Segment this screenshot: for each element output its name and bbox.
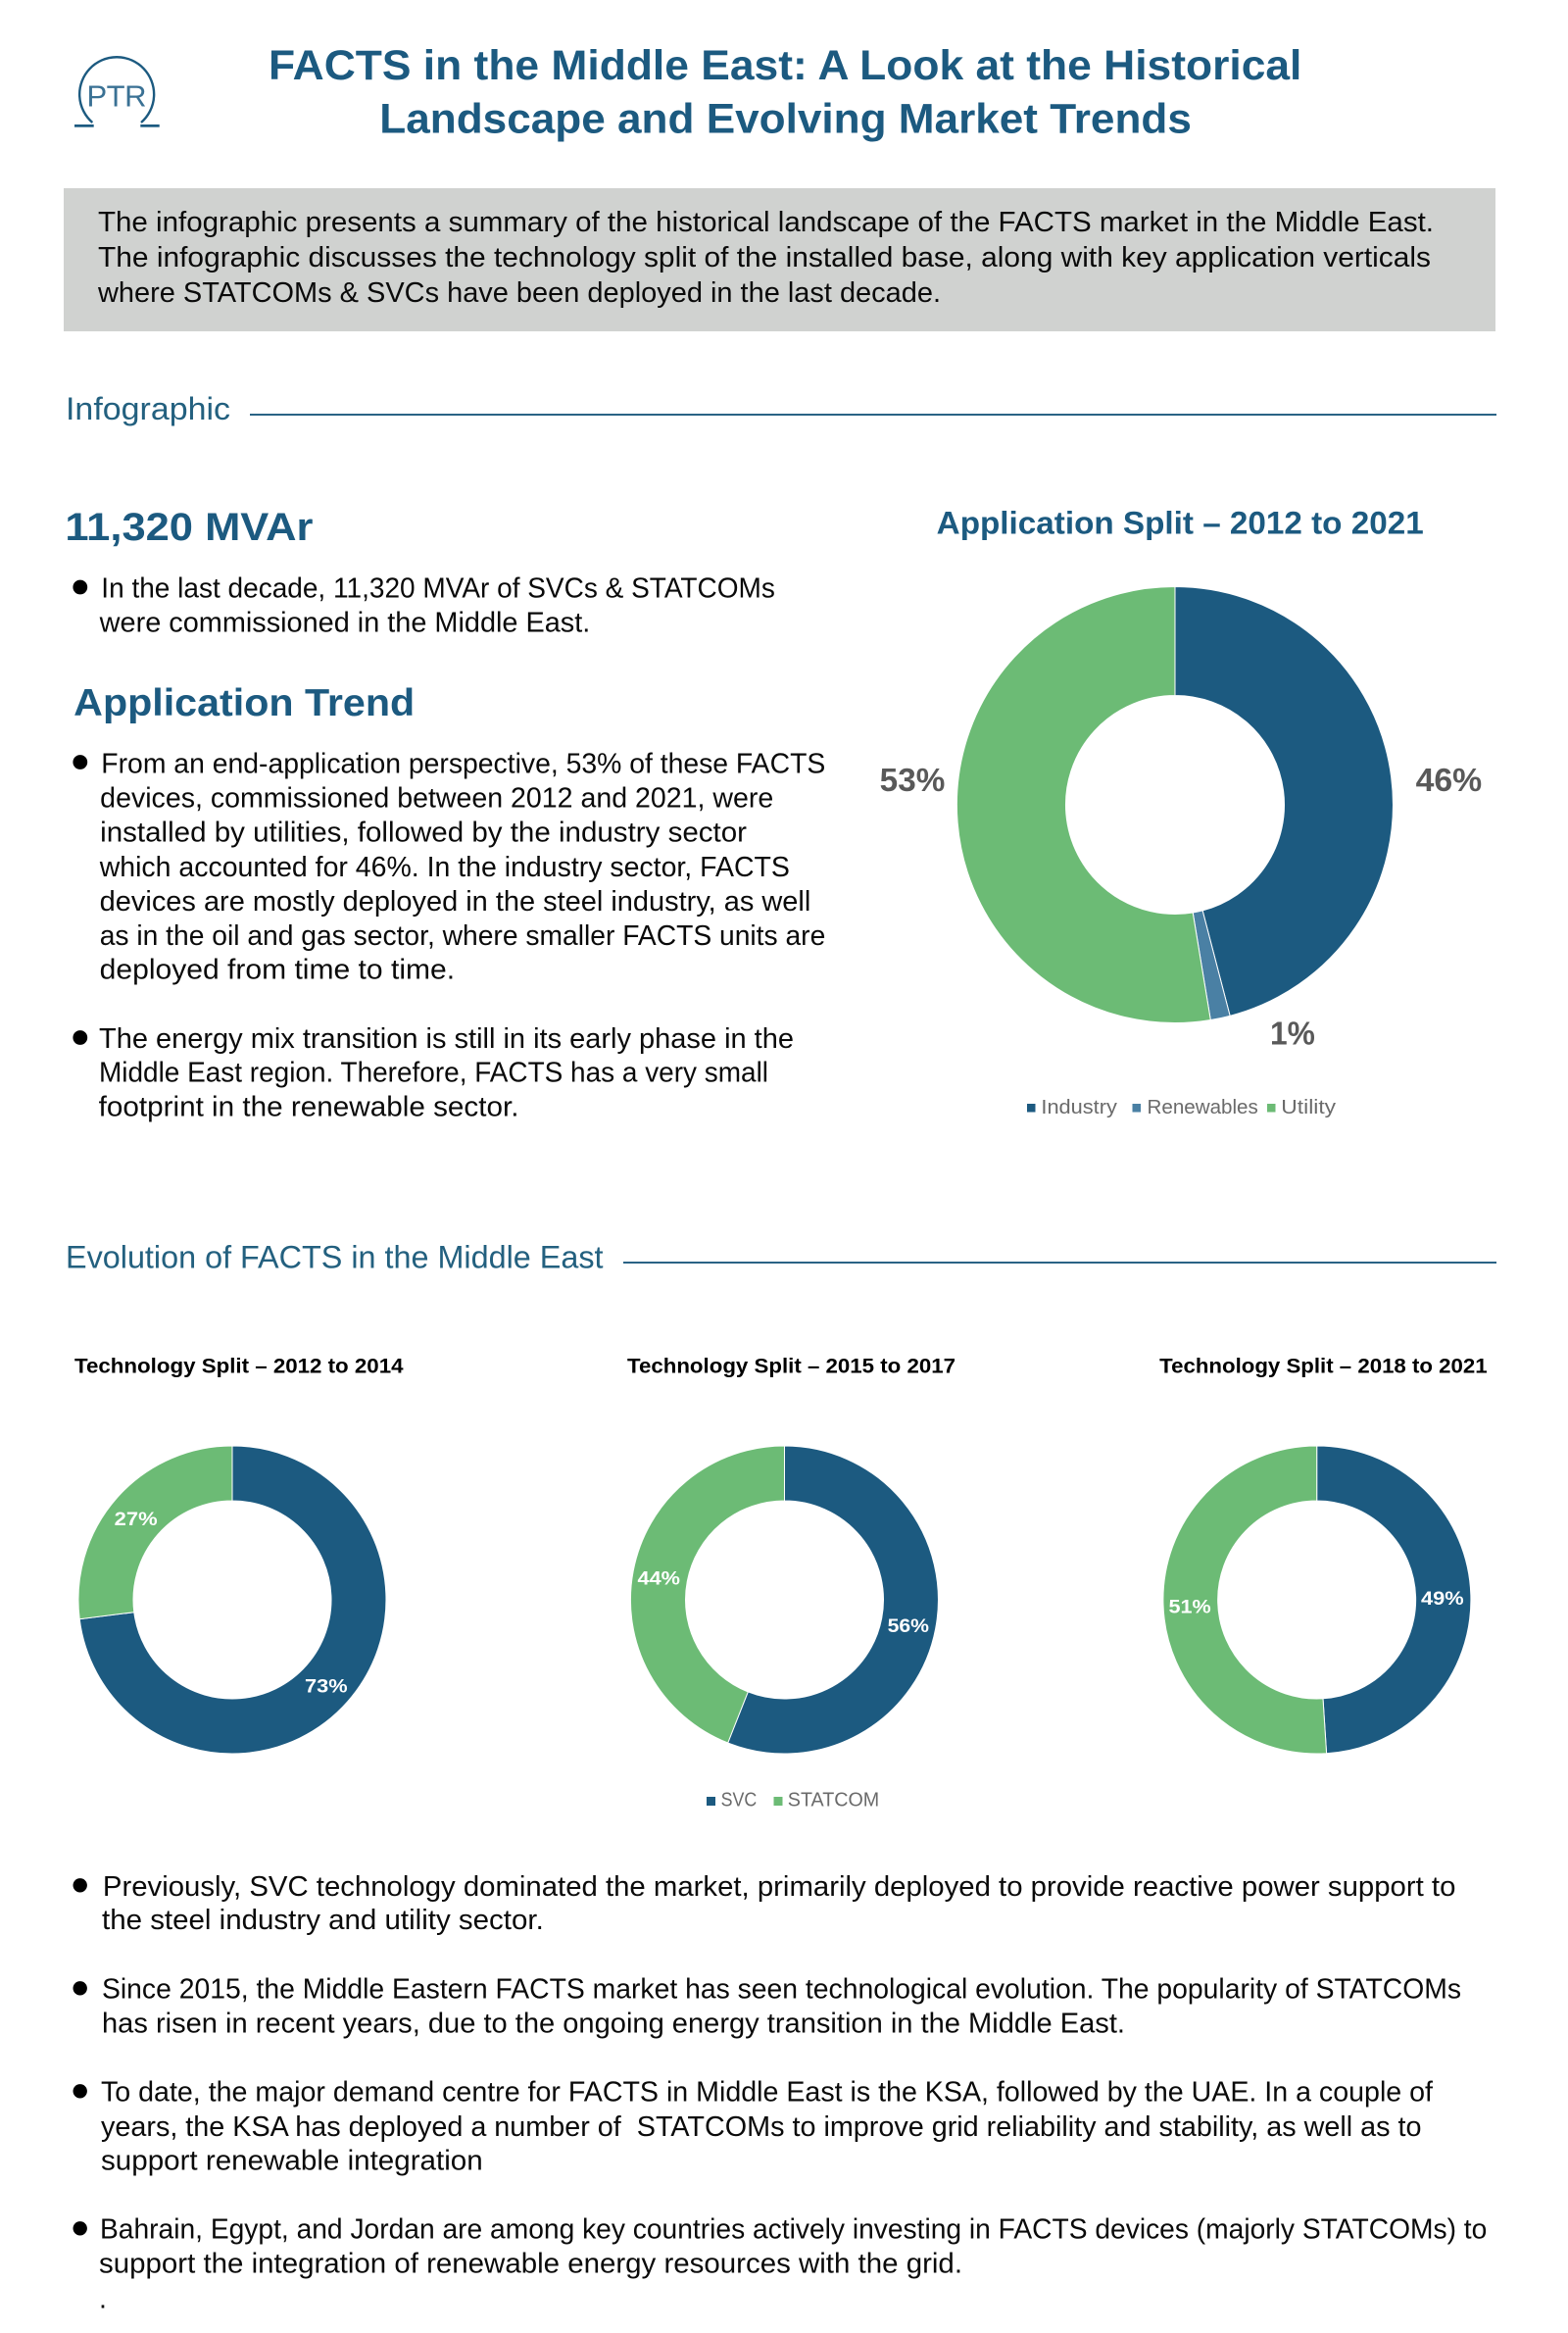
text block: SVC dominance bullet: the steel industry and utility sector. — [102, 1905, 544, 1936]
legend: technology split — [707, 1790, 879, 1812]
data labels: application split — [880, 762, 1482, 1051]
donut chart: 2018 to 2021 — [1163, 1446, 1471, 1754]
legend: application split: Renewables — [1147, 1097, 1258, 1118]
data labels: application split: 53% — [880, 762, 945, 798]
text block: installed capacity bullet: In the last decade, 11,320 MVAr of SVCs & STATCOMs — [101, 572, 775, 604]
donut chart: 2012 to 2014: 73% — [305, 1677, 348, 1698]
donut chart: 2018 to 2021: 49% — [1421, 1589, 1464, 1610]
text block: end-application bullet: From an end-application perspective, 53% of these FACTS — [101, 748, 825, 779]
title — [269, 42, 1301, 143]
text block: investing countries bullet: Bahrain, Egypt, and Jordan are among key countries actively investing in FACTS devices (majorly STATCOMs) to — [100, 2213, 1487, 2245]
text block: installed capacity bullet: were commissioned in the Middle East. — [99, 607, 590, 638]
segment: Industry 46% — [1175, 586, 1393, 1016]
text block: end-application bullet: devices, commissioned between 2012 and 2021, were — [100, 782, 773, 814]
text block: end-application bullet — [73, 748, 825, 986]
heading: 11,320 MVAr: 11,320 MVAr — [65, 506, 313, 549]
text block: end-application bullet: as in the oil and gas sector, where smaller FACTS units are — [100, 920, 825, 952]
data labels: application split: 46% — [1416, 762, 1482, 798]
text block: technological evolution bullet: Since 2015, the Middle Eastern FACTS market has seen technological evolution. The popularity of STATCOMs — [102, 1974, 1461, 2006]
text block: demand centre bullet: years, the KSA has deployed a number of STATCOMs to improve grid reliability and stability, as well as to — [101, 2111, 1421, 2143]
donut chart: 2012 to 2014 — [78, 1446, 386, 1754]
segment: STATCOM 27% — [78, 1446, 232, 1619]
title: FACTS in the Middle East: A Look at the Historical — [269, 42, 1301, 89]
panel: introduction summary: The infographic discusses the technology split of the installed base, along with key application verticals — [98, 242, 1431, 273]
title: Landscape and Evolving Market Trends — [379, 96, 1192, 143]
panel: introduction summary: where STATCOMs & SVCs have been deployed in the last decade. — [97, 277, 941, 309]
segment: SVC 56% — [728, 1446, 938, 1754]
donut chart: 2018 to 2021: 51% — [1168, 1598, 1211, 1618]
legend: technology split: SVC — [721, 1790, 757, 1812]
chart title: Technology Split 2015 to 2017: Technology Split – 2015 to 2017 — [627, 1355, 956, 1378]
text block: energy mix bullet: The energy mix transition is still in its early phase in the — [99, 1023, 794, 1055]
donut chart: 2015 to 2017 — [630, 1446, 938, 1754]
text block: end-application bullet: deployed from time to time. — [100, 955, 455, 986]
text block: SVC dominance bullet — [73, 1871, 1455, 1936]
legend: application split: Utility — [1281, 1097, 1336, 1118]
text block: demand centre bullet: To date, the major demand centre for FACTS in Middle East is the KSA, followed by the UAE. In a couple of — [101, 2076, 1433, 2108]
segment: STATCOM 51% — [1163, 1446, 1327, 1754]
segment: Renewables 1% — [1193, 911, 1230, 1019]
panel: introduction summary: The infographic presents a summary of the historical landscape of the FACTS market in the Middle East. — [98, 207, 1434, 238]
chart title: Application Split: Application Split – 2012 to 2021 — [937, 505, 1424, 540]
legend: application split — [1027, 1097, 1336, 1118]
text block: investing countries bullet — [73, 2213, 1487, 2280]
icon: PTR logo — [74, 57, 160, 127]
text block: technological evolution bullet — [73, 1974, 1461, 2039]
heading: Evolution of FACTS: Evolution of FACTS in the Middle East — [66, 1239, 604, 1274]
icon: PTR logo: PTR — [86, 78, 147, 113]
legend: application split: Industry — [1041, 1097, 1117, 1118]
legend: technology split: STATCOM — [788, 1790, 879, 1812]
text block: demand centre bullet: support renewable integration — [101, 2145, 483, 2176]
donut chart: 2015 to 2017: 56% — [888, 1616, 929, 1637]
text block: end-application bullet: which accounted for 46%. In the industry sector, FACTS — [99, 852, 790, 883]
text block: energy mix bullet: Middle East region. Therefore, FACTS has a very small — [99, 1058, 768, 1089]
panel: introduction summary — [64, 188, 1495, 331]
text block: investing countries bullet: support the integration of renewable energy resources with the grid. — [99, 2249, 962, 2280]
chart title: Technology Split 2018 to 2021: Technology Split – 2018 to 2021 — [1159, 1355, 1488, 1378]
donut chart: 2015 to 2017: 44% — [637, 1569, 680, 1590]
donut chart: 2012 to 2014: 27% — [115, 1510, 158, 1530]
donut chart: application split — [956, 586, 1393, 1023]
text block: installed capacity bullet — [73, 572, 775, 638]
data labels: application split: 1% — [1270, 1015, 1315, 1051]
text block: end-application bullet: installed by utilities, followed by the industry sector — [100, 818, 748, 849]
text block: SVC dominance bullet: Previously, SVC technology dominated the market, primarily deployed to provide reactive power support to — [103, 1871, 1455, 1903]
text: trailing period: . — [99, 2284, 107, 2315]
heading: Application Trend: Application Trend — [74, 682, 415, 724]
text block: energy mix bullet — [73, 1023, 794, 1122]
chart title: Technology Split 2012 to 2014: Technology Split – 2012 to 2014 — [74, 1355, 404, 1378]
segment: STATCOM 44% — [630, 1446, 784, 1743]
text block: energy mix bullet: footprint in the renewable sector. — [99, 1091, 518, 1122]
text block: demand centre bullet — [73, 2076, 1433, 2176]
segment: SVC 49% — [1317, 1446, 1471, 1754]
segment: Utility 53% — [956, 586, 1210, 1023]
segment: SVC 73% — [79, 1446, 386, 1754]
text block: technological evolution bullet: has risen in recent years, due to the ongoing energy transition in the Middle East. — [102, 2008, 1125, 2039]
text block: end-application bullet: devices are mostly deployed in the steel industry, as well — [100, 886, 810, 918]
heading: Infographic: Infographic — [66, 391, 230, 426]
